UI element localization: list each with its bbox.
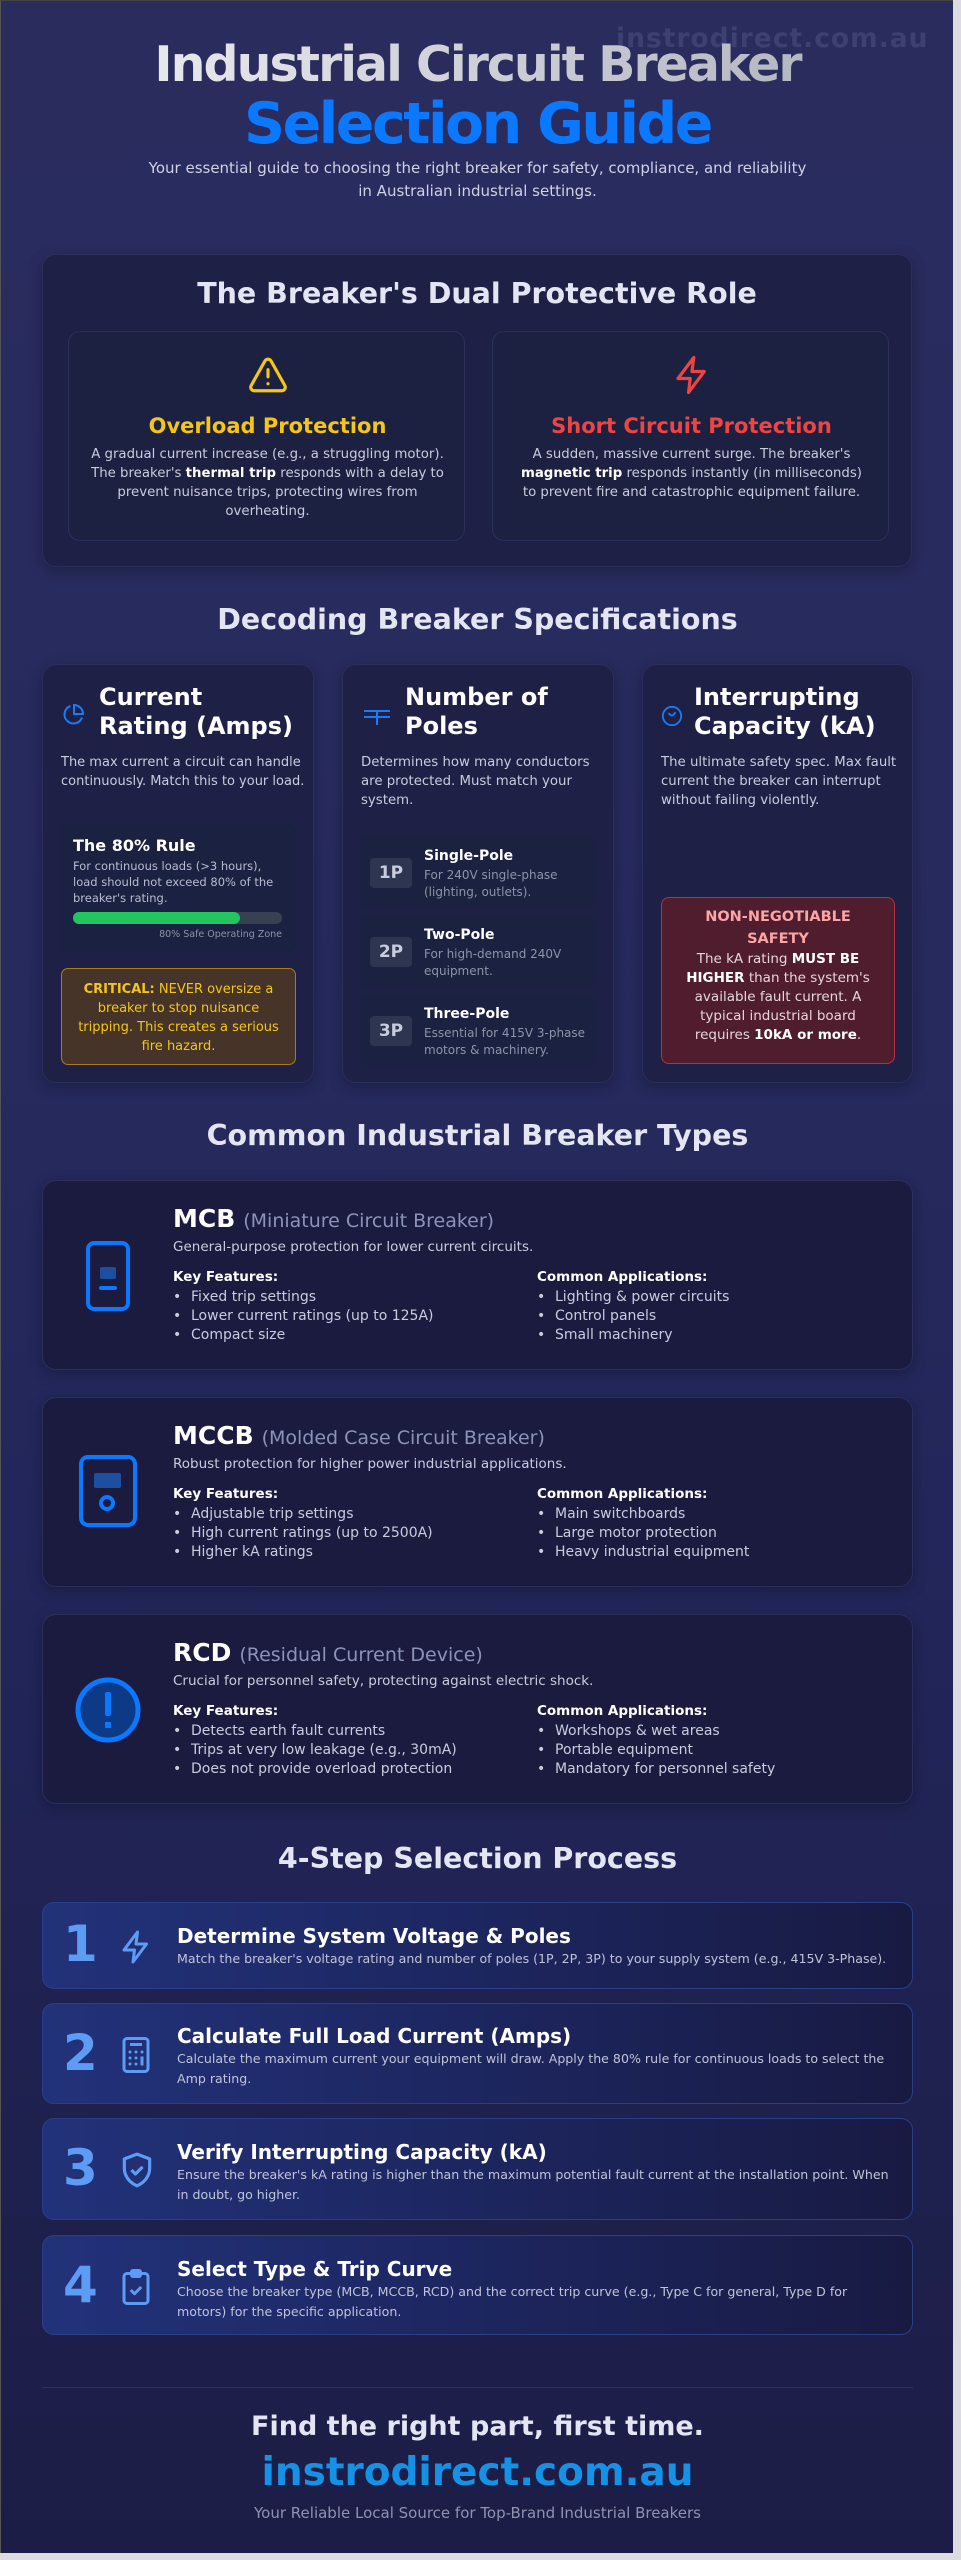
applications: Large motor protection	[555, 1525, 717, 1541]
subtitle: in Australian industrial settings.	[358, 182, 597, 200]
pole item 1P: Single-Pole	[424, 848, 513, 864]
applications: Control panels	[555, 1308, 656, 1324]
applications: Main switchboards	[555, 1506, 685, 1522]
pole item 3P: Essential for 415V 3-phase motors & machinery.	[424, 1026, 585, 1057]
footer: Find the right part, first time.	[251, 2411, 704, 2442]
title: Industrial Circuit Breaker	[154, 36, 801, 93]
panel: MCCB: Robust protection for higher power industrial applications.	[173, 1456, 567, 1472]
80% rule box: The 80% Rule	[73, 836, 196, 855]
applications: Common Applications:	[537, 1486, 707, 1502]
features: Fixed trip settings	[191, 1289, 316, 1305]
panel: MCCB	[42, 1397, 913, 1587]
watermark: instrodirect.com.au	[616, 23, 929, 54]
panel: poles	[342, 664, 614, 1083]
applications: Portable equipment	[555, 1742, 693, 1758]
step 1: Match the breaker's voltage rating and number of poles (1P, 2P, 3P) to your supply system (e.g., 415V 3-Phase).	[177, 1951, 886, 1966]
red safety box: NON-NEGOTIABLE SAFETY	[705, 909, 851, 947]
step 2: Calculate Full Load Current (Amps)	[177, 2024, 571, 2048]
icon: pie	[64, 704, 84, 724]
icon: poles	[364, 710, 390, 725]
80% rule box	[61, 824, 296, 952]
pole item 3P: 3P	[379, 1021, 403, 1041]
icon: calculator	[122, 2037, 150, 2073]
pole item 2P: 2P	[379, 942, 403, 962]
heading	[694, 683, 876, 740]
step 1: Determine System Voltage & Poles	[177, 1924, 571, 1948]
step 4: Select Type & Trip Curve	[177, 2257, 452, 2281]
heading: 4-step: 4-Step Selection Process	[278, 1842, 677, 1875]
card title: Overload Protection	[149, 414, 386, 438]
step 2	[42, 2003, 913, 2104]
card: overload	[68, 331, 465, 541]
heading: Number of	[405, 683, 548, 711]
applications: Small machinery	[555, 1327, 673, 1343]
80% rule box: For continuous loads (>3 hours), load should not exceed 80% of the breaker's rating.	[73, 859, 273, 905]
card: short circuit	[492, 331, 889, 541]
title: Selection Guide	[244, 91, 711, 157]
icon: shield	[122, 2152, 152, 2188]
icon: RCD alert	[76, 1678, 140, 1742]
heading: Rating (Amps)	[99, 712, 293, 740]
card text: The breaker's thermal trip responds with a delay to prevent nuisance trips, protecting wires from overheating.	[91, 466, 444, 519]
step 3: Verify Interrupting Capacity (kA)	[177, 2140, 547, 2164]
icon: gauge	[662, 706, 682, 726]
card text: A gradual current increase (e.g., a struggling motor).	[91, 447, 444, 462]
icon: bolt	[122, 1930, 148, 1964]
pole item 2P: Two-Pole	[424, 927, 495, 943]
red safety box	[661, 897, 895, 1064]
step 3: Ensure the breaker's kA rating is higher than the maximum potential fault current at the installation point. When in doubt, go higher.	[177, 2167, 889, 2202]
heading: Current	[99, 683, 202, 711]
step 4: Choose the breaker type (MCB, MCCB, RCD) and the correct trip curve (e.g., Type C for general, Type D for motors) for the specific application.	[177, 2284, 847, 2319]
applications: Heavy industrial equipment	[555, 1544, 749, 1560]
features: Adjustable trip settings	[191, 1506, 353, 1522]
pole item 1P: 1P	[379, 863, 403, 883]
features	[173, 1269, 434, 1343]
icon: lightning	[676, 356, 706, 394]
heading: Poles	[405, 712, 478, 740]
step 4: 4	[63, 2256, 98, 2314]
pole item 3P	[361, 994, 595, 1066]
panel: MCCB: MCCB (Molded Case Circuit Breaker)	[173, 1421, 545, 1450]
icon: MCCB	[79, 1455, 137, 1527]
heading: Interrupting	[694, 683, 860, 711]
features: High current ratings (up to 2500A)	[191, 1525, 433, 1541]
features	[173, 1486, 433, 1560]
step 2: 2	[63, 2024, 98, 2082]
footer	[251, 2411, 704, 2522]
pole item 2P	[361, 915, 595, 987]
applications: Lighting & power circuits	[555, 1289, 729, 1305]
subtitle: Your essential guide to choosing the right breaker for safety, compliance, and reliability	[149, 159, 806, 177]
pole item 1P: For 240V single-phase (lighting, outlets).	[424, 868, 558, 899]
panel: MCB	[42, 1180, 913, 1370]
features: Compact size	[191, 1327, 285, 1343]
heading	[405, 683, 548, 740]
features: Lower current ratings (up to 125A)	[191, 1308, 434, 1324]
description: The ultimate safety spec. Max fault current the breaker can interrupt without failing violently.	[661, 755, 896, 808]
step 1: 1	[63, 1915, 98, 1973]
applications	[537, 1269, 729, 1343]
panel: RCD: Crucial for personnel safety, protecting against electric shock.	[173, 1673, 593, 1689]
applications: Workshops & wet areas	[555, 1723, 720, 1739]
features	[173, 1703, 457, 1777]
title: MCB (Miniature Circuit Breaker)	[173, 1204, 494, 1233]
features: Key Features:	[173, 1703, 278, 1719]
icon: MCB	[86, 1241, 130, 1311]
red safety box: The kA rating MUST BE HIGHER than the system's available fault current. A typical industrial board requires 10kA or more.	[686, 951, 870, 1043]
card title: Short Circuit Protection	[551, 414, 832, 438]
footer: instrodirect.com.au	[261, 2450, 694, 2495]
critical callout	[61, 968, 296, 1065]
pole item 2P: For high-demand 240V equipment.	[424, 947, 561, 978]
features: Does not provide overload protection	[191, 1761, 452, 1777]
step 4	[42, 2235, 913, 2335]
heading: Capacity (kA)	[694, 712, 876, 740]
icon: clipboard	[122, 2269, 150, 2305]
footer: Your Reliable Local Source for Top-Brand Industrial Breakers	[254, 2504, 701, 2522]
panel: RCD	[42, 1614, 913, 1804]
progress bar	[73, 912, 282, 924]
features: Key Features:	[173, 1486, 278, 1502]
panel: MCB: General-purpose protection for lower current circuits.	[173, 1239, 533, 1255]
subtitle	[148, 159, 806, 200]
applications: Common Applications:	[537, 1703, 707, 1719]
panel: interrupting capacity	[642, 664, 913, 1083]
applications: Mandatory for personnel safety	[555, 1761, 775, 1777]
applications: Common Applications:	[537, 1269, 707, 1285]
heading	[99, 683, 293, 740]
panel: current rating	[42, 664, 314, 1083]
pole item 1P	[361, 836, 595, 908]
card text: A sudden, massive current surge. The breaker's magnetic trip responds instantly (in milliseconds) to prevent fire and catastrophic equipment failure.	[521, 447, 862, 500]
80% rule box: 80% Safe Operating Zone	[159, 929, 282, 940]
step 1	[42, 1902, 913, 1989]
heading: breaker types: Common Industrial Breaker Types	[207, 1119, 748, 1152]
features: Trips at very low leakage (e.g., 30mA)	[191, 1742, 457, 1758]
features: Key Features:	[173, 1269, 278, 1285]
applications	[537, 1703, 775, 1777]
heading: specs: Decoding Breaker Specifications	[217, 603, 738, 636]
applications	[537, 1486, 750, 1560]
icon: warning	[249, 358, 287, 392]
pole item 3P: Three-Pole	[424, 1006, 509, 1022]
panel: dual protective role	[42, 254, 912, 567]
step 2: Calculate the maximum current your equipment will draw. Apply the 80% rule for continuous loads to select the Amp rating.	[177, 2051, 884, 2086]
heading: The Breaker's Dual Protective Role	[197, 277, 757, 310]
step 3: 3	[63, 2139, 98, 2197]
features: Detects earth fault currents	[191, 1723, 385, 1739]
panel: RCD: RCD (Residual Current Device)	[173, 1638, 483, 1667]
description: Determines how many conductors are protected. Must match your system.	[361, 755, 590, 808]
critical callout: CRITICAL: NEVER oversize a breaker to stop nuisance tripping. This creates a serious fire hazard.	[78, 982, 279, 1054]
description: The max current a circuit can handle continuously. Match this to your load.	[61, 755, 304, 789]
features: Higher kA ratings	[191, 1544, 313, 1560]
step 3	[42, 2118, 913, 2220]
title	[154, 36, 802, 157]
